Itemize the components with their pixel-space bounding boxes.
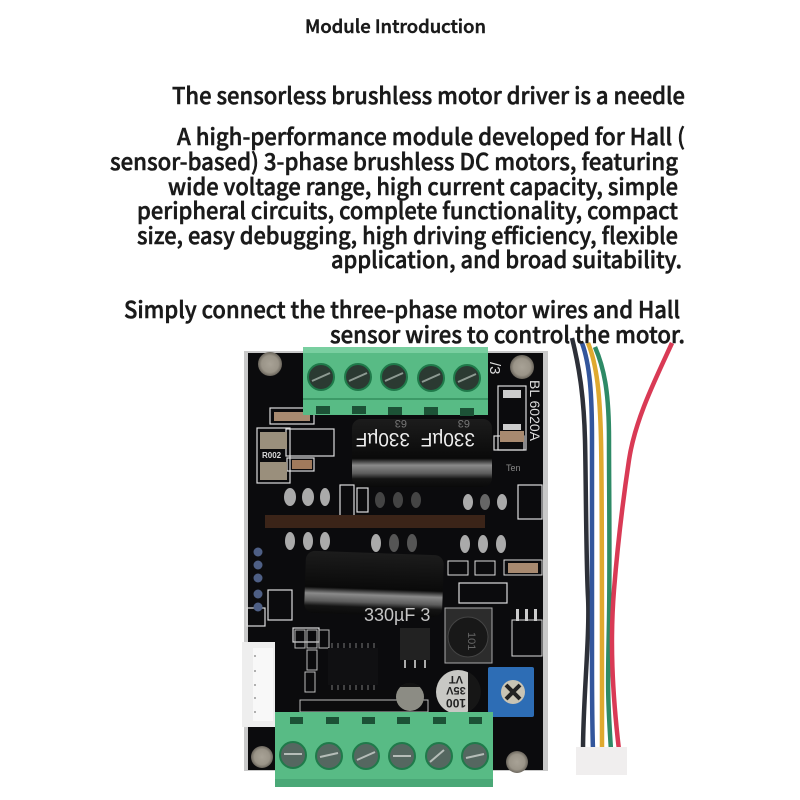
solder pads and components: /3 — [486, 362, 503, 375]
usage paragraph: sensor wires to control the motor. — [330, 316, 685, 350]
title: Module Introduction — [305, 13, 486, 39]
description paragraph — [110, 118, 685, 275]
description paragraph: peripheral circuits, complete functionality, compact — [137, 192, 678, 226]
100uF electrolytic capacitor: 100 — [446, 696, 466, 710]
top capacitor: 330µF — [356, 428, 410, 449]
wire connector — [576, 747, 627, 775]
wire harness — [572, 338, 672, 775]
description paragraph: sensor-based) 3-phase brushless DC motors, featuring — [110, 143, 678, 177]
inductor — [445, 608, 492, 663]
description paragraph: size, easy debugging, high driving efficiency, flexible — [137, 217, 678, 251]
description paragraph: application, and broad suitability. — [331, 241, 682, 275]
solder pads and components: Ten — [506, 463, 521, 473]
side LEDs — [254, 548, 262, 612]
bottom green terminal block — [275, 712, 493, 787]
solder pads and components: R002 — [262, 451, 282, 460]
top capacitor: 63 — [458, 417, 470, 429]
description paragraph: wide voltage range, high current capacity, simple — [168, 168, 678, 202]
yellow wire — [588, 343, 602, 750]
red wire — [612, 343, 672, 750]
solder pads and components — [247, 362, 543, 712]
100uF electrolytic capacitor: 35V — [446, 684, 466, 696]
board — [244, 351, 548, 771]
blue wire — [582, 343, 593, 750]
heading text: The sensorless brushless motor driver is a needle — [172, 77, 685, 111]
mounting screws — [251, 352, 534, 773]
right pads — [448, 560, 542, 656]
top capacitor: 63 — [395, 417, 407, 429]
white connector — [242, 642, 275, 727]
top capacitor: 330µF — [421, 428, 475, 449]
black wire — [572, 338, 588, 750]
100uF electrolytic capacitor: VT — [449, 673, 463, 685]
usage paragraph — [124, 291, 685, 350]
lower capacitor — [304, 551, 444, 625]
lower left pads — [295, 630, 428, 712]
lower capacitor: 330µF 3 — [364, 605, 430, 625]
top capacitor — [352, 417, 492, 487]
inductor: 101 — [465, 632, 477, 650]
small electrolytic capacitor — [396, 683, 424, 711]
description paragraph: A high-performance module developed for Hall ( — [177, 118, 685, 152]
usage paragraph: Simply connect the three-phase motor wires and Hall — [124, 291, 680, 325]
solder joints — [284, 488, 507, 553]
100uF electrolytic capacitor — [436, 670, 481, 714]
blue potentiometer — [488, 667, 534, 717]
green wire — [595, 347, 611, 750]
circuit board photo — [242, 347, 548, 787]
small regulators — [400, 628, 430, 668]
board label: BL 6020A — [527, 380, 543, 442]
top green terminal block — [303, 347, 488, 416]
controller chip — [328, 643, 378, 690]
brown strip — [265, 515, 485, 528]
